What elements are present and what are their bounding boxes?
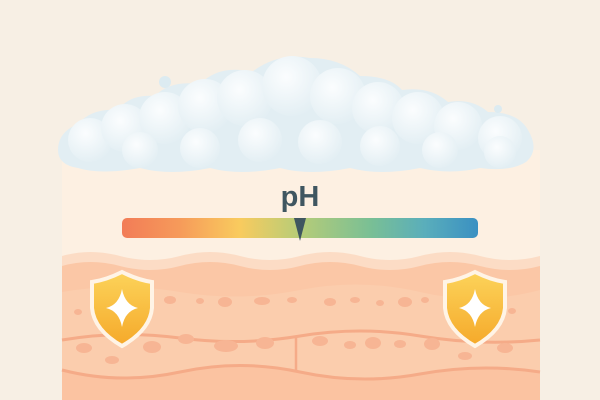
marker — [294, 218, 306, 241]
icon: shield left — [92, 272, 152, 346]
icon: shield right — [445, 272, 505, 346]
heading: pH: pH — [281, 181, 319, 213]
skin layers — [62, 252, 540, 400]
panel — [62, 150, 540, 400]
foam — [58, 56, 534, 172]
pH scale bar — [122, 218, 478, 241]
